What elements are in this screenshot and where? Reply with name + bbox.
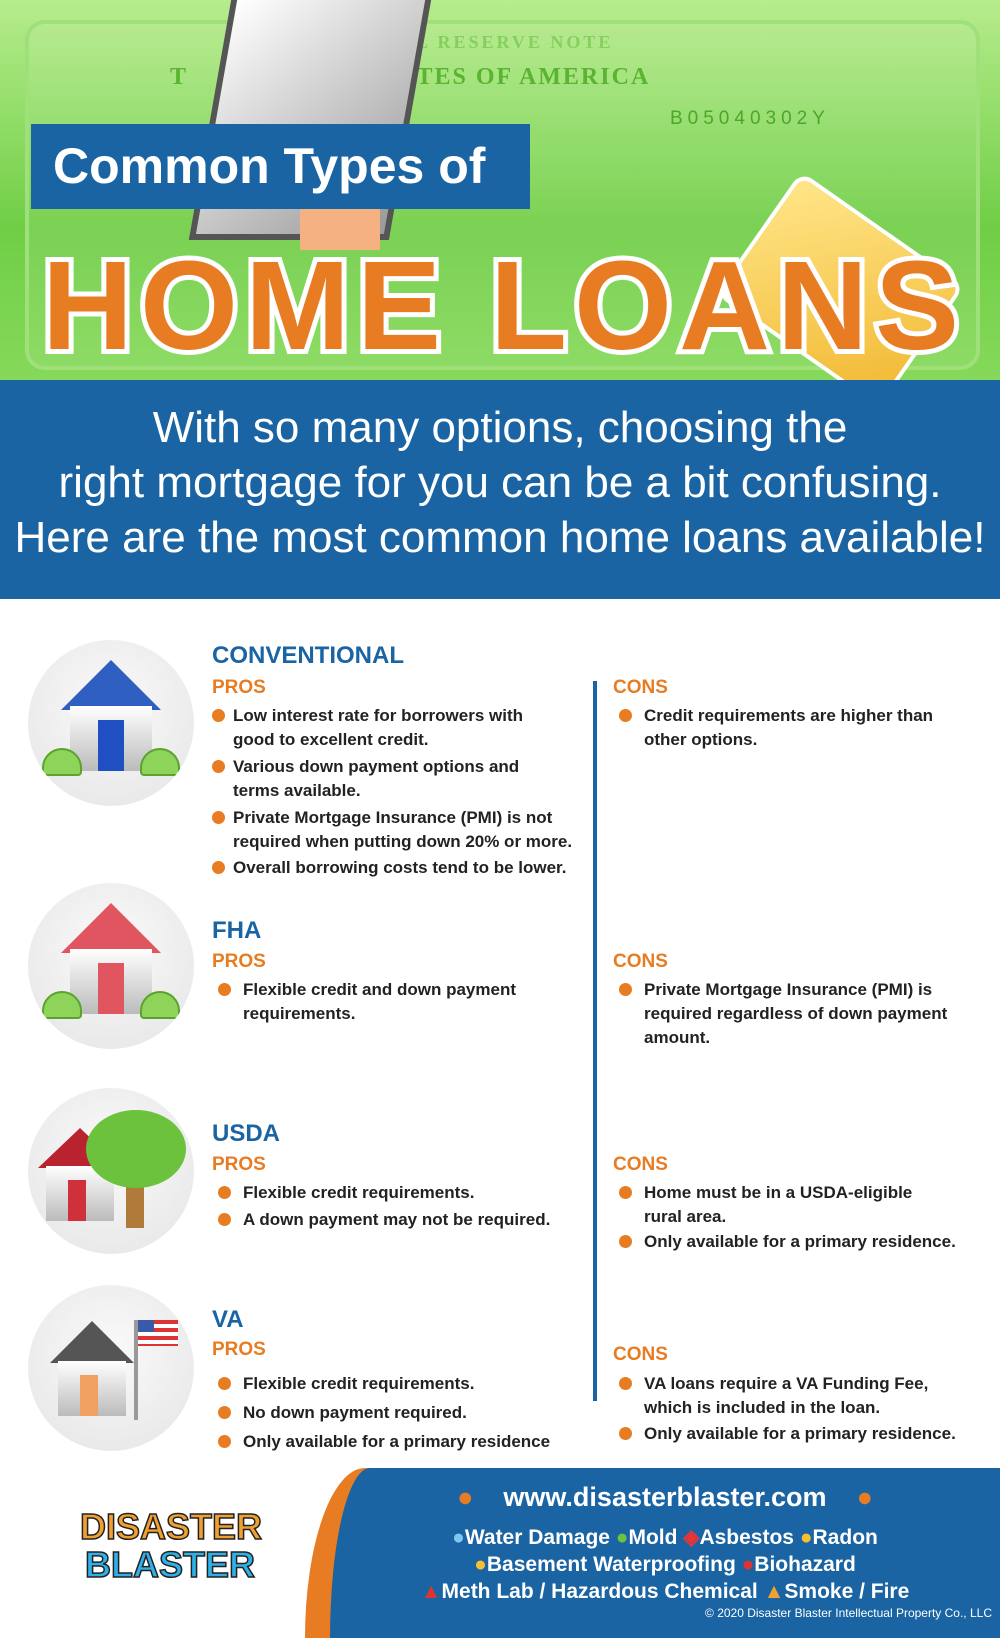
panel: USDA: PROS bbox=[212, 1154, 266, 1175]
panel: VA: No down payment required. bbox=[243, 1403, 467, 1422]
panel: FHA: amount. bbox=[644, 1028, 710, 1047]
panel: conventional bbox=[28, 640, 933, 877]
icon: red house bbox=[28, 883, 194, 1049]
icon: house with tree bbox=[28, 1088, 194, 1254]
panel: USDA: CONS bbox=[613, 1154, 668, 1175]
intro band: Here are the most common home loans available! bbox=[15, 513, 985, 562]
panel: VA: Only available for a primary residence bbox=[243, 1432, 550, 1451]
panel: VA: Only available for a primary residence. bbox=[644, 1424, 956, 1443]
panel: USDA: Home must be in a USDA-eligible bbox=[644, 1183, 912, 1202]
panel: VA: PROS bbox=[212, 1339, 266, 1360]
logo: Disaster Blaster bbox=[80, 1506, 262, 1585]
panel: USDA: Only available for a primary residence. bbox=[644, 1232, 956, 1251]
panel: USDA: rural area. bbox=[644, 1207, 726, 1226]
panel: USDA: USDA bbox=[212, 1120, 280, 1147]
title: Common Types of: Common Types of bbox=[53, 138, 485, 194]
panel: FHA: requirements. bbox=[243, 1004, 355, 1023]
panel: conventional: Various down payment options and bbox=[233, 757, 519, 776]
panel: conventional: CONVENTIONAL bbox=[212, 642, 404, 669]
icon: price tag bbox=[715, 171, 965, 409]
panel: conventional: other options. bbox=[644, 730, 757, 749]
services list: ●Water Damage ●Mold ◈Asbestos ●Radon bbox=[452, 1526, 878, 1549]
panel: VA: CONS bbox=[613, 1344, 668, 1365]
panel: VA bbox=[28, 1285, 956, 1451]
title: Common Types of bbox=[31, 124, 530, 209]
copyright: © 2020 Disaster Blaster Intellectual Property Co., LLC bbox=[705, 1606, 992, 1620]
panel: FHA: Private Mortgage Insurance (PMI) is bbox=[644, 980, 932, 999]
panel: VA: Flexible credit requirements. bbox=[243, 1374, 474, 1393]
icon: house with flag bbox=[28, 1285, 194, 1451]
panel: FHA: CONS bbox=[613, 951, 668, 972]
services list: ▲Meth Lab / Hazardous Chemical ▲Smoke / Fire bbox=[421, 1580, 909, 1603]
footer bbox=[80, 1468, 1000, 1638]
title: HOME LOANS: HOME LOANS bbox=[42, 235, 966, 376]
panel: USDA: A down payment may not be required. bbox=[243, 1210, 550, 1229]
panel: conventional: Low interest rate for borrowers with bbox=[233, 706, 523, 725]
logo: Disaster Blaster: BLASTER bbox=[85, 1544, 255, 1585]
panel: conventional: good to excellent credit. bbox=[233, 730, 429, 749]
panel: FHA: required regardless of down payment bbox=[644, 1004, 947, 1023]
panel: USDA: Flexible credit requirements. bbox=[243, 1183, 474, 1202]
header: dollar bill background: T D STATES OF AMERICA bbox=[170, 64, 650, 90]
panel: FHA: FHA bbox=[212, 917, 261, 944]
services list bbox=[421, 1526, 909, 1603]
panel: USDA bbox=[28, 1088, 956, 1254]
header: dollar bill background bbox=[0, 0, 1000, 380]
panel: conventional: required when putting down 20% or more. bbox=[233, 832, 572, 851]
header: dollar bill background: B05040302Y bbox=[670, 108, 830, 129]
services list: ●Basement Waterproofing ●Biohazard bbox=[474, 1553, 856, 1576]
icon: blue house bbox=[28, 640, 194, 806]
panel: FHA bbox=[28, 883, 948, 1049]
panel: conventional: CONS bbox=[613, 677, 668, 698]
orange curve and blue footer panel bbox=[305, 1468, 1000, 1638]
divider line bbox=[593, 681, 597, 1401]
intro band bbox=[0, 380, 1000, 599]
intro band: With so many options, choosing the bbox=[153, 403, 847, 452]
header: dollar bill background: AL RESERVE NOTE bbox=[400, 32, 613, 52]
panel: VA: VA bbox=[212, 1306, 244, 1333]
panel: VA: which is included in the loan. bbox=[644, 1398, 880, 1417]
panel: FHA: PROS bbox=[212, 951, 266, 972]
panel: VA: VA loans require a VA Funding Fee, bbox=[644, 1374, 928, 1393]
panel: conventional: PROS bbox=[212, 677, 266, 698]
footer url: ● www.disasterblaster.com ● bbox=[457, 1482, 873, 1512]
panel: conventional: Credit requirements are higher than bbox=[644, 706, 933, 725]
logo: Disaster Blaster: DISASTER bbox=[80, 1506, 262, 1547]
panel: FHA: Flexible credit and down payment bbox=[243, 980, 516, 999]
intro band: right mortgage for you can be a bit confusing. bbox=[59, 458, 941, 507]
panel: conventional: terms available. bbox=[233, 781, 361, 800]
icon: house graphic bbox=[189, 0, 431, 240]
panel: conventional: Overall borrowing costs tend to be lower. bbox=[233, 858, 566, 877]
panel: conventional: Private Mortgage Insurance (PMI) is not bbox=[233, 808, 552, 827]
